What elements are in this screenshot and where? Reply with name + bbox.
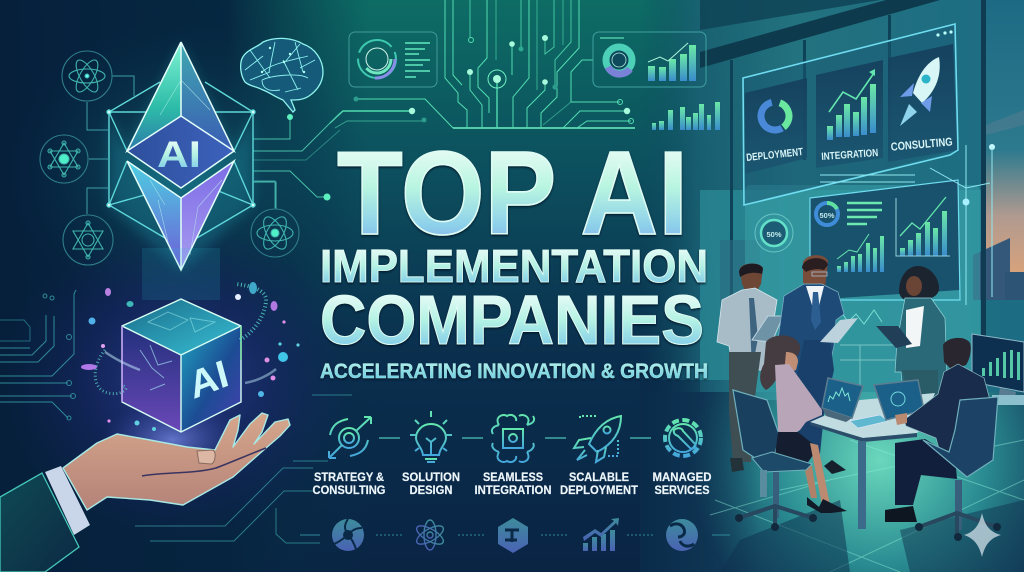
partner logo row (300, 518, 730, 553)
label: integration: INTEGRATION (821, 147, 879, 163)
label: seamless integration: INTEGRATION (474, 483, 552, 497)
person: seated man (885, 338, 990, 522)
upper crystal (127, 42, 181, 151)
logo: swirl one (332, 519, 364, 551)
circuit lines: from hexagon to title (253, 113, 340, 209)
logo: atom (414, 520, 446, 550)
title (320, 127, 708, 383)
donut chart (756, 97, 794, 135)
label: managed services: MANAGED (652, 470, 712, 484)
logo: hexagon (498, 518, 528, 553)
label: strategy and consulting: STRATEGY & (314, 470, 384, 484)
icon: atom circle 4 (251, 209, 299, 257)
logo: AI diamond network (87, 42, 275, 270)
title line: companies: COMPANIES (320, 281, 704, 359)
light beam (142, 248, 220, 300)
table (810, 393, 1024, 529)
monitor (972, 334, 1024, 403)
title line: top ai: TOP AI (337, 127, 688, 260)
office chair left base (735, 452, 817, 531)
icon: brain (241, 38, 323, 112)
office chair left back (733, 390, 780, 468)
connection stubs (87, 76, 275, 214)
person: standing man in navy suit with tablet (778, 255, 858, 474)
bar chart: floating (652, 102, 720, 130)
logo: swirl two (666, 519, 698, 551)
glowing connector lines (820, 144, 995, 305)
services row (312, 411, 712, 497)
sleeve (0, 473, 79, 572)
icon: glowing cube (122, 299, 241, 432)
panel: deployment integration consulting dashboard (743, 24, 959, 205)
floor (640, 392, 1024, 572)
panel: dashboard widget right (593, 32, 706, 87)
laptop left (822, 378, 863, 422)
label: solution design: DESIGN (410, 483, 453, 497)
lower crystal (127, 161, 181, 270)
palm and fingers (63, 413, 290, 510)
icon: integration (492, 415, 534, 462)
office chair right (915, 397, 1001, 541)
circuit lines: bottom left (135, 395, 352, 543)
glowing nodes (354, 35, 630, 122)
laptop right (874, 380, 924, 420)
panel: office scene (640, 0, 1024, 572)
AI label: AI (157, 134, 201, 175)
gauge: 50 percent: 50% (766, 230, 782, 239)
icon: atom circle 3 (63, 215, 113, 265)
label: consulting: CONSULTING (890, 136, 953, 154)
hexagon frame (107, 82, 255, 238)
icon: lightbulb (410, 411, 452, 462)
label: deployment: DEPLOYMENT (746, 146, 804, 164)
icon: strategy (329, 417, 371, 458)
person: standing man in grey shirt (717, 264, 783, 472)
hand and sleeve (0, 413, 290, 572)
window wall (640, 0, 1024, 400)
icon: atom circle 1 (62, 51, 112, 101)
rear dashboard wall (745, 185, 980, 400)
icon: atom circle 2 (40, 135, 88, 183)
particles and swirl (81, 282, 300, 431)
person: standing woman in teal blazer (876, 266, 947, 412)
logo: rising bars (583, 518, 619, 551)
panel: dashboard widget left (349, 32, 437, 87)
label: seamless integration: SEAMLESS (483, 470, 543, 484)
AI label: AI (185, 353, 233, 408)
label: scalable deployment: DEPLOYMENT (560, 483, 638, 497)
circuit lines: left mid (0, 290, 76, 420)
panel: lower analytics dashboard (810, 180, 960, 300)
circuit board: top centre (330, 0, 635, 128)
title line: implementation: IMPLEMENTATION (320, 240, 708, 292)
label: strategy and consulting: CONSULTING (312, 483, 386, 497)
label: solution design: SOLUTION (402, 470, 460, 484)
icon: rocket (574, 416, 621, 462)
icon: sparkle watermark (964, 513, 1001, 557)
icon: rocket (900, 57, 940, 126)
bar chart: integration (827, 69, 876, 140)
label: managed services: SERVICES (654, 483, 710, 497)
gauge: 50 percent (755, 214, 793, 252)
icon: managed services gear (665, 420, 701, 456)
person: seated woman (760, 335, 847, 513)
service connectors (379, 437, 651, 439)
label: scalable deployment: SCALABLE (569, 470, 629, 484)
gauge text: 50% (819, 211, 835, 220)
cuff (45, 466, 90, 535)
subtitle: ACCELERATING INNOVATION & GROWTH (320, 360, 708, 383)
